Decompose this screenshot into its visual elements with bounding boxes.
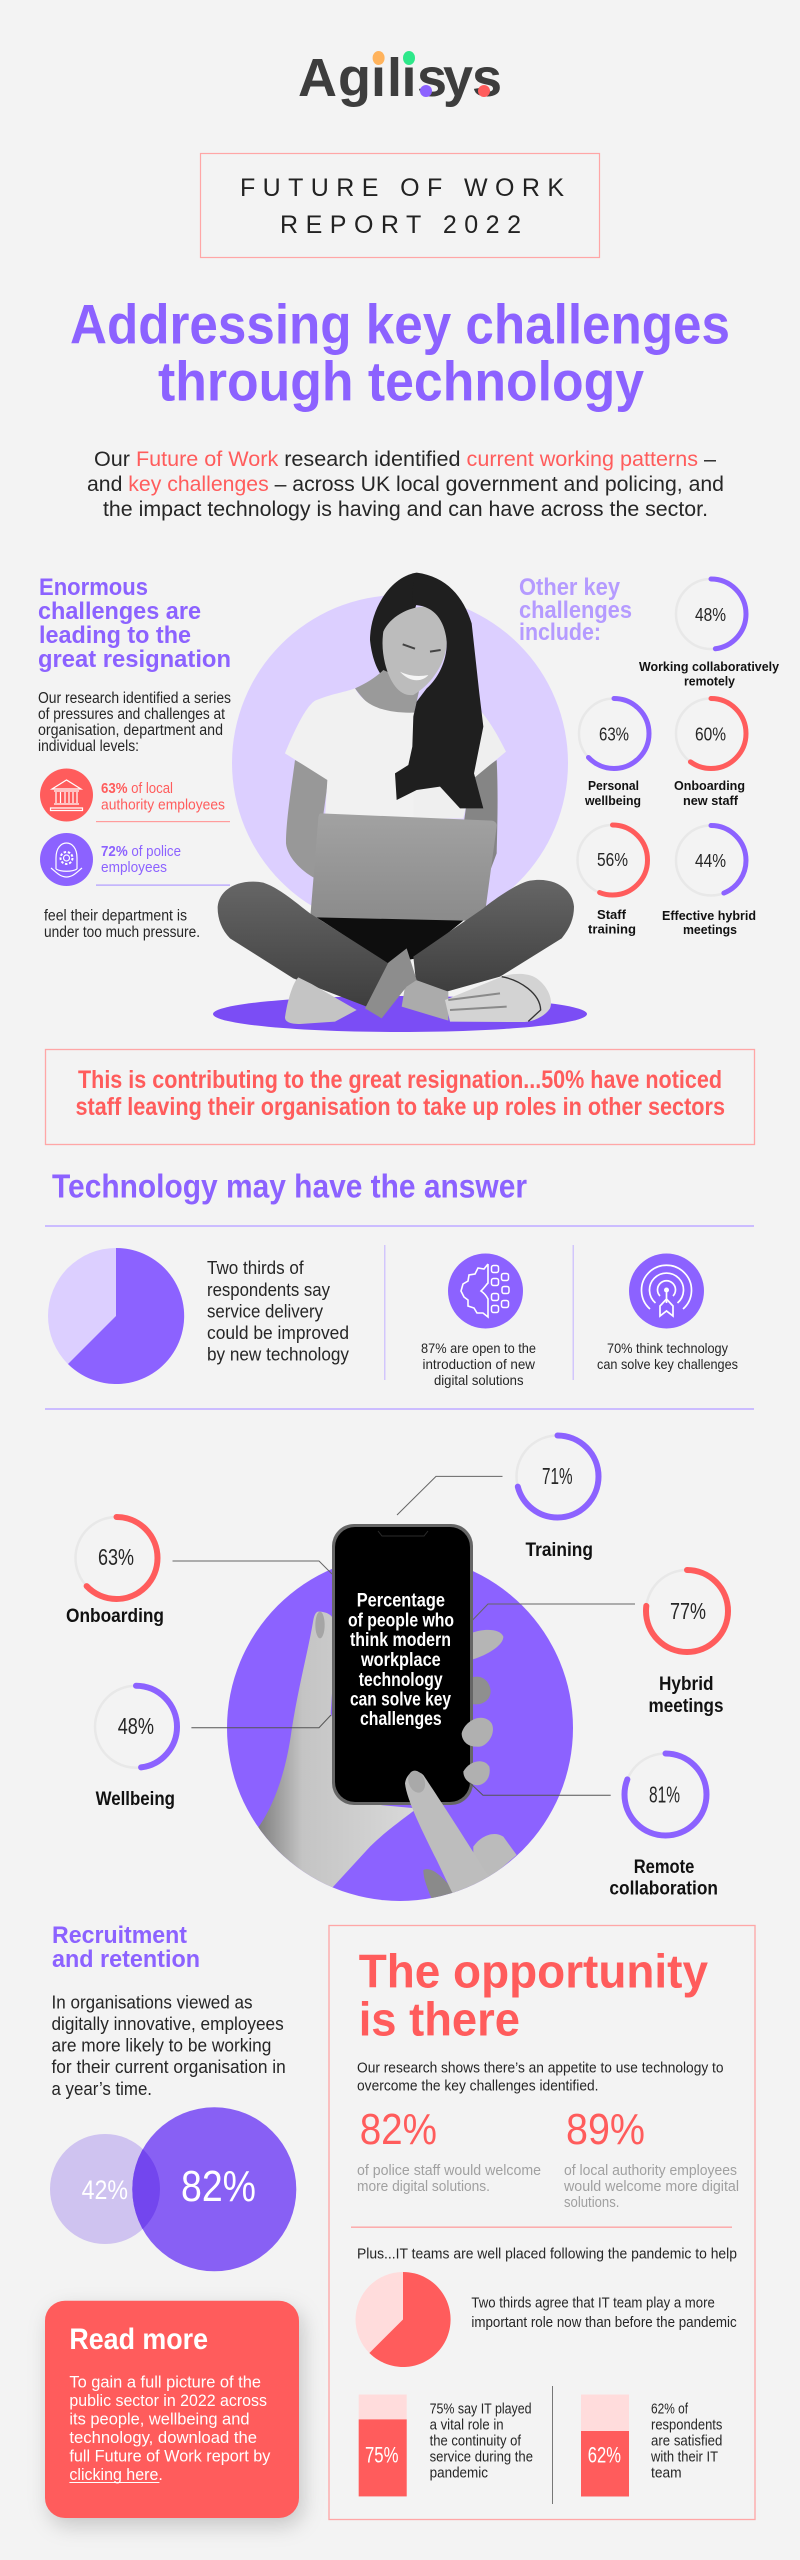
ring: 48% working collaboratively <box>639 579 780 688</box>
text: digitally innovative: digitally innovative, employees <box>52 2014 284 2034</box>
stat: 89% local authority <box>563 2105 739 2211</box>
ring: 60% onboarding new staff: new staff <box>683 793 739 808</box>
connector: training <box>397 1476 502 1515</box>
text: 87% open: introduction of new <box>422 1356 536 1372</box>
text: two thirds agree: Two thirds agree that IT team play a more <box>471 2295 715 2311</box>
heading: great resignation: great resignation <box>38 646 231 673</box>
stat: 82% police staff: of police staff would welcome <box>357 2162 541 2179</box>
stat: 82% police staff: 82% <box>360 2105 437 2154</box>
panel: enormous challenges <box>38 574 231 941</box>
illustration: phone and hand <box>227 1524 573 1903</box>
text: appetite: Our research shows there’s an appetite to use technology to <box>357 2060 724 2077</box>
text: two thirds agree <box>471 2295 737 2331</box>
ring: 71% training: 71% <box>542 1463 572 1489</box>
ring: 77% hybrid meetings: Hybrid <box>659 1674 714 1695</box>
ring: 63% onboarding <box>66 1517 164 1627</box>
card: read more: full Future of Work report by <box>69 2447 271 2465</box>
research text: Our research identified a series <box>38 690 231 707</box>
ring: 44% effective hybrid meetings: meetings <box>683 922 737 937</box>
stat: 89% local authority: of local authority employees <box>564 2162 737 2179</box>
icon: target antenna <box>629 1254 704 1328</box>
pie chart: IT team role <box>356 2272 451 2367</box>
woman figure <box>218 573 574 1024</box>
ring: 71% training <box>516 1436 598 1561</box>
text: 75% vital role: service during the <box>430 2450 533 2466</box>
heading: the opportunity: The opportunity <box>359 1944 708 1998</box>
ring: 63% personal wellbeing: wellbeing <box>584 793 641 808</box>
panel: the opportunity is there <box>329 1926 755 2520</box>
venn circles: 42% and 82% <box>50 2107 296 2271</box>
text: appetite <box>357 2060 724 2095</box>
stat: local authority: 63% of local <box>101 780 173 797</box>
heading: recruitment: Recruitment <box>52 1922 187 1949</box>
icon: police helmet <box>40 833 93 886</box>
text: 70% think: 70% think technology <box>607 1340 728 1356</box>
heading: recruitment: and retention <box>52 1946 200 1973</box>
panel: recruitment and retention <box>50 1922 296 2271</box>
phone screen text: of people who <box>348 1611 454 1632</box>
lavender circle <box>232 595 568 931</box>
ring: 56% staff training: Staff <box>597 907 627 922</box>
ring: 81% remote collaboration: collaboration <box>609 1879 718 1900</box>
phone <box>332 1524 473 1805</box>
stat: 89% local authority: would welcome more digital <box>563 2178 739 2195</box>
fingers over phone <box>405 1718 517 1903</box>
ring: 60% onboarding new staff <box>674 698 746 808</box>
ring: 44% effective hybrid meetings: 44% <box>695 851 726 871</box>
hand back <box>253 1612 503 1890</box>
heading: great resignation: leading to the <box>39 622 191 649</box>
heading: the opportunity: is there <box>359 1992 520 2046</box>
report title box: REPORT 2022 <box>280 211 521 239</box>
ring: 56% staff training: training <box>588 922 636 936</box>
phone screen text: think modern <box>350 1630 451 1651</box>
research text: individual levels: <box>38 738 139 755</box>
ring: 71% training: Training <box>526 1540 593 1561</box>
stat: local authority <box>96 780 230 822</box>
stat: 82% police staff <box>357 2105 541 2195</box>
ring: 48% wellbeing: Wellbeing <box>96 1789 175 1810</box>
text: 87% open <box>421 1340 536 1388</box>
ring: 63% personal wellbeing <box>579 698 649 808</box>
illustration: woman with laptop <box>213 573 587 1032</box>
heading: other key challenges: Other key <box>519 574 621 601</box>
stat: police: employees <box>101 859 167 876</box>
ring: 81% remote collaboration <box>609 1754 718 1900</box>
text: two thirds of respondents: respondents say <box>207 1279 331 1300</box>
intro paragraph: Our Future of Work research identified current working patterns – <box>94 448 716 471</box>
callout: great resignation <box>46 1050 754 1144</box>
text: pressure: under too much pressure. <box>44 924 200 941</box>
heading: other key challenges: include: <box>519 619 601 646</box>
pie chart: two thirds <box>48 1248 184 1384</box>
bar: 62% <box>581 2394 629 2496</box>
text: 70% think <box>597 1340 738 1372</box>
bar: 75% <box>359 2394 407 2496</box>
stat: police: 72% of police <box>101 843 181 860</box>
heading: the opportunity <box>359 1944 708 2046</box>
text: 70% think: can solve key challenges <box>597 1356 738 1372</box>
text: pressure <box>44 908 200 941</box>
purple ground ellipse <box>213 996 587 1032</box>
stat: local authority: authority employees <box>101 796 225 814</box>
ring: 63% personal wellbeing: Personal <box>588 778 639 793</box>
main heading: through technology <box>158 350 644 413</box>
phone screen text <box>348 1591 454 1730</box>
text: 62% satisfied: team <box>651 2465 682 2481</box>
main heading <box>70 292 730 413</box>
bar: 62%: 62% <box>588 2443 621 2468</box>
heading: other key challenges: challenges <box>519 597 632 624</box>
phone screen text: challenges <box>360 1709 442 1730</box>
intro paragraph: the impact technology is having and can have across the sector. <box>103 498 708 521</box>
phone screen text: Percentage <box>357 1591 445 1612</box>
connector: hybrid meetings <box>471 1604 635 1622</box>
text: 62% satisfied: with their IT <box>650 2450 718 2466</box>
text: 75% vital role: pandemic <box>430 2465 488 2481</box>
connector: remote collaboration <box>470 1783 611 1795</box>
ring: 77% hybrid meetings <box>646 1570 728 1717</box>
text: digitally innovative: are more likely to be working <box>52 2036 271 2056</box>
card: read more: public sector in 2022 across <box>69 2392 267 2410</box>
logo: Agilisys: Agilisys <box>298 48 502 108</box>
text: 75% vital role <box>430 2402 533 2481</box>
connector: wellbeing <box>191 1715 331 1728</box>
connector: onboarding <box>172 1561 332 1574</box>
phone screen text: workplace <box>360 1650 441 1671</box>
ring: 48% working collaboratively: Working collaboratively <box>639 659 780 674</box>
phone screen text: can solve key <box>350 1690 451 1711</box>
intro paragraph: and key challenges – across UK local government and policing, and <box>87 473 724 496</box>
text: pressure: feel their department is <box>44 908 187 924</box>
phone screen text: technology <box>359 1670 443 1691</box>
text: 62% satisfied: 62% of <box>651 2402 689 2418</box>
text: digitally innovative: In organisations viewed as <box>52 1993 252 2013</box>
research text: organisation, department and <box>38 722 223 739</box>
card: read more: To gain a full picture of the <box>69 2373 261 2391</box>
text: 62% satisfied <box>650 2402 722 2481</box>
ring: 48% working collaboratively: remotely <box>684 674 736 688</box>
ring: 63% onboarding: Onboarding <box>66 1606 164 1627</box>
ring: 63% personal wellbeing: 63% <box>599 725 629 745</box>
ring: 60% onboarding new staff: Onboarding <box>674 778 745 793</box>
card: read more: Read more <box>69 2323 208 2356</box>
text: digitally innovative: a year’s time. <box>52 2079 152 2099</box>
card: read more <box>45 2301 299 2518</box>
text: two thirds of respondents: Two thirds of <box>207 1257 304 1278</box>
ring: 48% wellbeing: 48% <box>118 1713 154 1739</box>
stat: police <box>96 843 230 886</box>
icon: gear with digital nodes <box>448 1254 523 1328</box>
ring: 56% staff training: 56% <box>597 850 628 870</box>
text: 75% vital role: a vital role in <box>430 2418 504 2434</box>
text: 87% open: 87% are open to the <box>421 1340 536 1356</box>
stat: 89% local authority: solutions. <box>564 2194 619 2211</box>
venn circles: 42% and 82%: 42% <box>82 2175 128 2205</box>
heading: great resignation: challenges are <box>38 598 201 625</box>
text: 62% satisfied: respondents <box>651 2418 722 2434</box>
heading: technology may have the answer: Technology may have the answer <box>52 1168 527 1204</box>
purple circle behind phone <box>227 1555 573 1901</box>
ring: 56% staff training <box>578 825 648 936</box>
text: two thirds of respondents <box>207 1257 350 1365</box>
text: 75% vital role: the continuity of <box>430 2433 522 2449</box>
report title box <box>200 154 600 258</box>
text: 87% open: digital solutions <box>434 1372 524 1388</box>
card: read more: technology, download the <box>69 2429 257 2447</box>
heading: other key challenges <box>519 574 632 646</box>
ring: 60% onboarding new staff: 60% <box>695 725 726 745</box>
ring: 63% onboarding: 63% <box>98 1544 134 1570</box>
heading: great resignation <box>38 574 231 673</box>
research text: of pressures and challenges at <box>38 706 226 723</box>
ring: 44% effective hybrid meetings <box>662 826 756 937</box>
card: read more: its people, wellbeing and <box>69 2410 250 2428</box>
text: 62% satisfied: are satisfied <box>651 2433 722 2449</box>
ring: 81% remote collaboration: Remote <box>634 1857 694 1878</box>
text: two thirds agree: important role now than before the pandemic <box>471 2315 737 2331</box>
report title box: FUTURE OF WORK <box>240 174 564 202</box>
ring: 77% hybrid meetings: 77% <box>670 1598 706 1624</box>
main heading: Addressing key challenges <box>70 292 730 356</box>
heading: recruitment <box>52 1922 200 1973</box>
card: read more: clicking here. <box>69 2466 163 2484</box>
ring: 48% working collaboratively: 48% <box>695 605 726 625</box>
heading: great resignation: Enormous <box>39 574 148 601</box>
icon: bank <box>40 768 93 822</box>
intro paragraph <box>87 448 724 521</box>
stat: 89% local authority: 89% <box>566 2105 645 2154</box>
stat: 82% police staff: more digital solutions. <box>357 2178 490 2195</box>
text: digitally innovative <box>52 1993 286 2099</box>
ring: 81% remote collaboration: 81% <box>649 1782 680 1808</box>
text: appetite: overcome the key challenges identified. <box>357 2078 598 2095</box>
text: digitally innovative: for their current organisation in <box>52 2057 286 2077</box>
research text <box>38 690 231 755</box>
text: two thirds of respondents: could be improved <box>207 1322 349 1343</box>
ring: 44% effective hybrid meetings: Effective hybrid <box>662 908 756 923</box>
bar: 75%: 75% <box>365 2443 398 2468</box>
text: two thirds of respondents: service delivery <box>207 1300 324 1322</box>
ring: 77% hybrid meetings: meetings <box>648 1696 724 1717</box>
text: plus IT teams: Plus...IT teams are well placed following the pandemic to help <box>357 2246 737 2263</box>
text: two thirds of respondents: by new technology <box>207 1344 350 1365</box>
text: 75% vital role: 75% say IT played <box>430 2402 532 2418</box>
ring: 48% wellbeing <box>95 1686 177 1810</box>
venn circles: 42% and 82%: 82% <box>181 2162 256 2211</box>
